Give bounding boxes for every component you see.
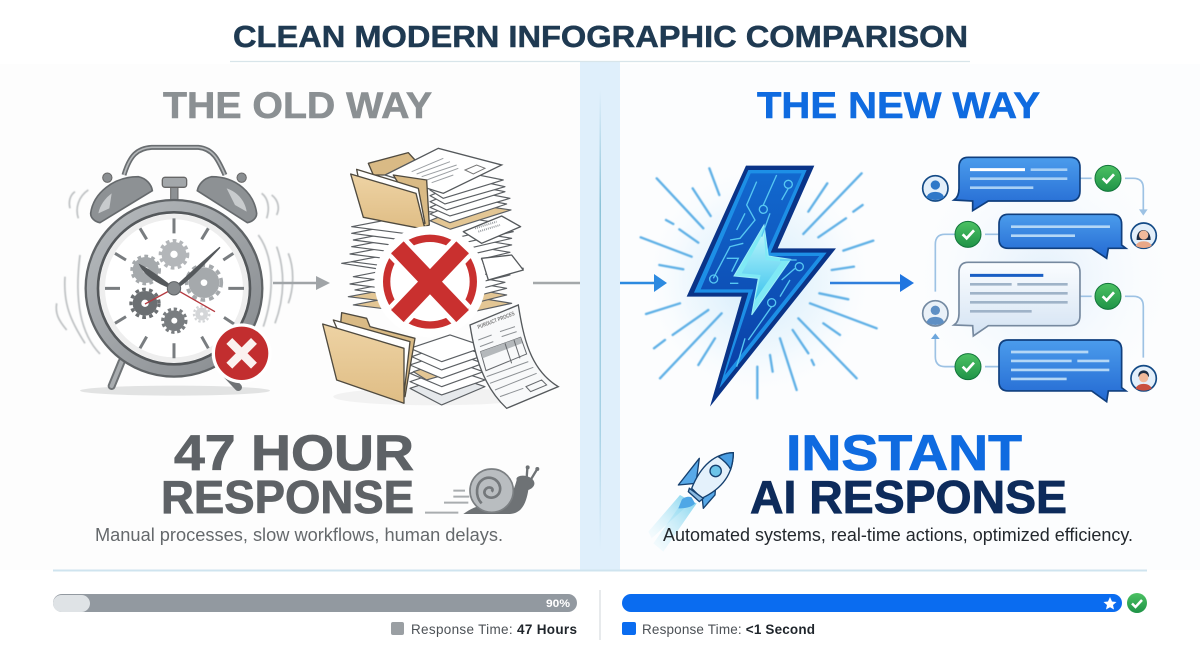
legend: new way: Response Time: <1 Second — [642, 622, 815, 637]
top document sheet — [385, 148, 502, 193]
heading: the new way: THE NEW WAY — [757, 85, 1040, 126]
arrow: bolt to chat — [830, 274, 914, 292]
description: old way: Manual processes, slow workflows, human delays. — [95, 525, 503, 545]
stat: 47 hour response — [161, 425, 414, 523]
stat: instant ai response — [750, 425, 1067, 523]
title underline — [230, 60, 970, 62]
icon: rocket — [648, 453, 733, 552]
chat bubble 4 — [999, 340, 1126, 402]
chat bubble 1 — [954, 157, 1080, 211]
description: new way: Automated systems, real-time actions, optimized efficiency. — [663, 525, 1133, 545]
legend: old way: Response Time: 47 Hours — [411, 622, 577, 637]
icon: star — [1104, 597, 1116, 610]
chat bubble 2 — [999, 214, 1126, 258]
circuit traces — [710, 175, 803, 367]
vertical bar separator — [599, 590, 601, 640]
arrow: documents to divider — [533, 282, 580, 284]
icon: check badge — [1127, 593, 1147, 613]
energy rays — [641, 168, 877, 398]
icon: snail — [425, 465, 539, 514]
loose sheets — [463, 216, 523, 280]
bolt body — [687, 166, 836, 407]
red x stamp — [374, 226, 486, 337]
icon: lightning bolt with rays — [641, 166, 877, 407]
stat: instant ai response: INSTANT — [786, 425, 1022, 481]
chat bubble 3 — [954, 262, 1080, 336]
clock gears — [131, 241, 221, 332]
panel: new way — [620, 64, 1200, 570]
folder: upper front — [351, 169, 429, 229]
check badges — [955, 165, 1121, 380]
horizontal rule above bars — [53, 570, 1147, 572]
folder: lower — [323, 313, 415, 403]
title: CLEAN MODERN INFOGRAPHIC COMPARISON — [233, 19, 968, 54]
clock ticks — [105, 218, 244, 358]
arrow: clock to documents — [273, 276, 330, 290]
center divider band — [580, 62, 620, 570]
stat: instant ai response: AI RESPONSE — [750, 471, 1067, 523]
icon: alarm clock — [56, 147, 293, 396]
bar value: 90% — [546, 598, 570, 610]
form document — [470, 305, 558, 408]
avatars — [923, 176, 1156, 391]
progress: old way — [53, 594, 577, 612]
red x badge — [215, 327, 268, 380]
heading: the old way: THE OLD WAY — [163, 85, 432, 126]
arrow: divider to bolt — [620, 274, 667, 292]
paper stack — [342, 173, 523, 405]
icon: document stack with red x — [323, 148, 558, 408]
stat: 47 hour response: 47 HOUR — [174, 425, 414, 481]
stat: 47 hour response: RESPONSE — [161, 471, 414, 523]
folder: top — [368, 153, 430, 175]
panel: old way — [0, 64, 580, 570]
connectors — [935, 178, 1143, 367]
form document: PURDUCT PROCES — [477, 311, 516, 331]
icon: chat workflow — [910, 145, 1177, 412]
progress: new way — [622, 594, 1122, 612]
